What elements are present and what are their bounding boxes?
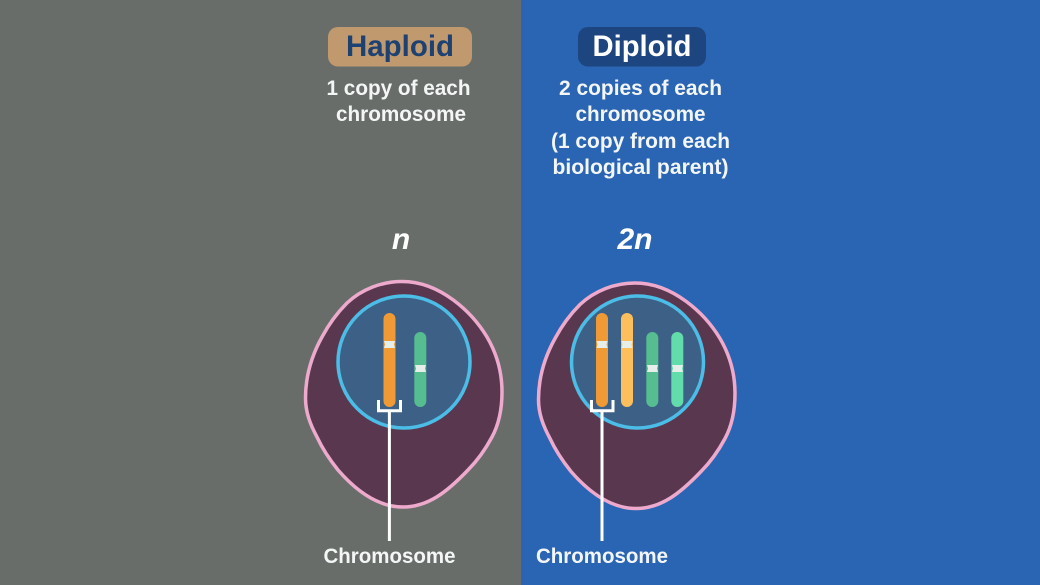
- bracket and leader line: [592, 400, 613, 541]
- chromosome: green: [414, 332, 426, 407]
- text: diploid description: [551, 76, 730, 179]
- label: diploid Chromosome: Chromosome: [536, 544, 668, 568]
- label: haploid Chromosome: Chromosome: [324, 544, 456, 568]
- chromosome: light green: [671, 332, 683, 407]
- cell membrane: [538, 283, 735, 508]
- chromosome: green: [646, 332, 658, 407]
- chromosome: orange: [384, 313, 396, 407]
- bracket and leader line: [378, 400, 400, 541]
- heading: Diploid: [578, 27, 706, 66]
- label: 2n: 2n: [616, 223, 653, 256]
- cell membrane: [306, 282, 502, 507]
- heading: Haploid: Haploid: [346, 30, 454, 63]
- text: haploid description: 1 copy of each: [326, 76, 470, 100]
- text: haploid description: chromosome: [336, 102, 466, 126]
- diagram: diploid cell: [538, 283, 735, 541]
- heading: Diploid: Diploid: [592, 30, 692, 63]
- diagram: haploid cell: [306, 282, 502, 541]
- text: diploid description: biological parent): [552, 155, 728, 179]
- text: diploid description: chromosome: [576, 102, 706, 126]
- chromosome: yellow: [621, 313, 633, 407]
- nucleus: [572, 296, 704, 428]
- text: diploid description: 2 copies of each: [559, 76, 722, 100]
- text: diploid description: (1 copy from each: [551, 129, 730, 153]
- panel: diploid background: [521, 0, 1040, 585]
- chromosome: orange: [596, 313, 608, 407]
- nucleus: [338, 296, 470, 428]
- panel: haploid background: [0, 0, 521, 585]
- heading: Haploid: [328, 27, 472, 66]
- text: haploid description: [326, 76, 470, 126]
- label: n: n: [392, 223, 410, 256]
